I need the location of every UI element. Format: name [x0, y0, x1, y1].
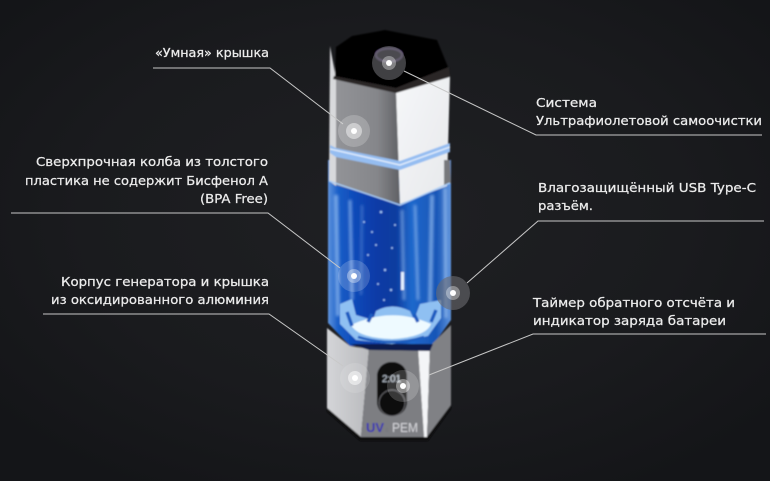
- UV text: Система: [536, 96, 597, 110]
- callout: flask: [11, 155, 370, 292]
- USB text: [538, 181, 756, 213]
- body text: [51, 275, 269, 307]
- timer text: Таймер обратного отсчёта и: [532, 296, 735, 310]
- hotspot: flask: [338, 260, 370, 292]
- callout: timer: [387, 296, 766, 402]
- hotspot: UV: [372, 46, 406, 80]
- brand logo: &: [385, 428, 389, 434]
- flask text: (BPA Free): [200, 192, 268, 206]
- product: water bottle: [327, 30, 451, 441]
- cap: [329, 30, 451, 205]
- flask glass: [328, 160, 451, 346]
- hotspot: smart lid: [338, 115, 370, 147]
- flask text: Сверхпрочная колба из толстого: [36, 155, 268, 169]
- lid top: [335, 30, 450, 90]
- flask text: [25, 155, 269, 206]
- illuminated flask bottom: [340, 299, 441, 344]
- callout: smart lid: «Умная» крышка: [155, 46, 269, 60]
- brand logo: [366, 421, 418, 435]
- callout: smart lid: [153, 46, 370, 147]
- hotspot: body: [340, 363, 370, 393]
- timer text: индикатор заряда батареи: [533, 314, 726, 328]
- body text: из оксидированного алюминия: [51, 293, 269, 307]
- brand logo: UV: [366, 421, 385, 435]
- USB text: разъём.: [538, 199, 593, 213]
- hotspot: timer: [387, 370, 419, 402]
- callout: UV self-cleaning: [372, 46, 762, 135]
- brand logo: PEM: [392, 421, 418, 435]
- body text: Корпус генератора и крышка: [61, 275, 269, 289]
- generator base: [327, 325, 451, 441]
- USB text: Влагозащищённый USB Type-C: [538, 181, 756, 195]
- hotspot: USB: [436, 276, 470, 310]
- UV text: [536, 96, 762, 128]
- flask text: пластика не содержит Бисфенол А: [25, 174, 269, 188]
- callout: body material: [43, 275, 370, 393]
- timer text: [532, 296, 735, 328]
- timer screen: 2:01: [382, 374, 401, 385]
- uv lamp: [376, 48, 402, 62]
- blue light ring: [330, 143, 450, 170]
- callout: USB Type-C: [436, 181, 764, 310]
- UV text: Ультрафиолетовой самоочистки: [536, 114, 762, 128]
